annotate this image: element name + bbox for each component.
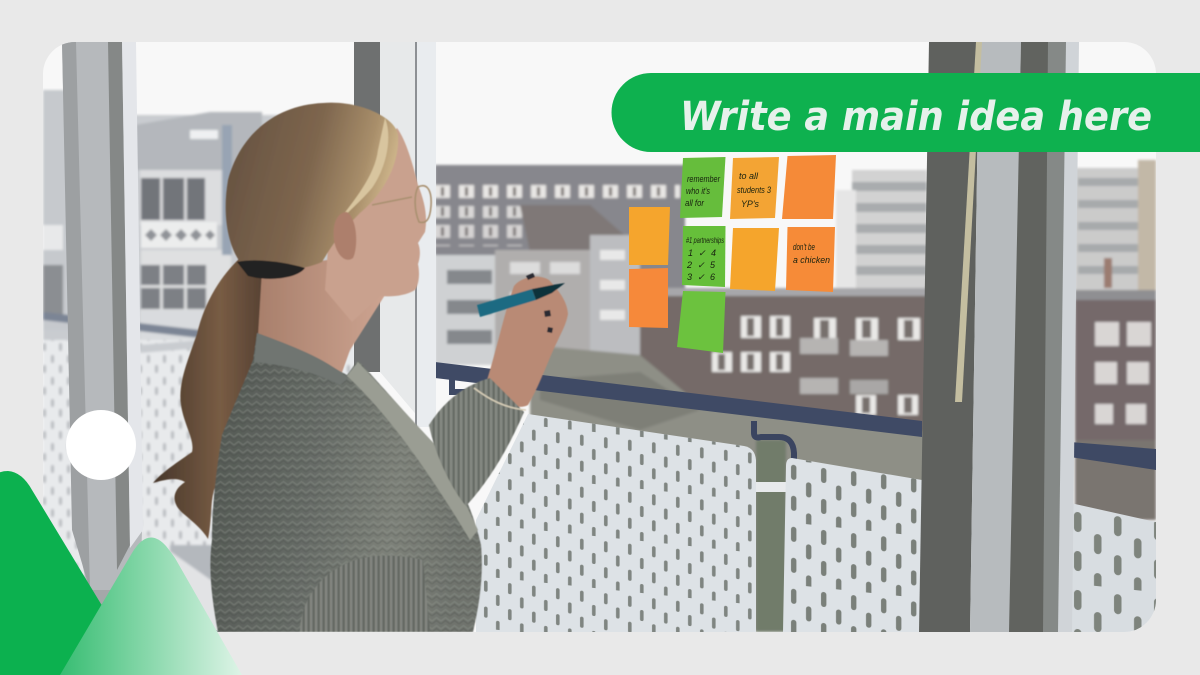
note: to all students: to all xyxy=(739,171,759,181)
note: to all students xyxy=(730,157,779,219)
brown building xyxy=(638,286,925,433)
note: don't be a chicken: a chicken xyxy=(793,255,830,265)
note: blank green bottom xyxy=(677,291,726,353)
perforated balcony panels and railing xyxy=(435,362,1156,632)
note: don't be a chicken: don't be xyxy=(793,242,815,252)
front placket xyxy=(347,362,478,540)
right pale apartment block xyxy=(836,170,927,295)
white lower rail xyxy=(756,482,786,492)
sweater collar xyxy=(254,333,348,385)
note: blank yellow middle xyxy=(730,228,779,291)
face xyxy=(325,128,426,322)
note: don't be a chicken xyxy=(786,227,835,292)
note: checklist xyxy=(682,226,726,287)
sleeve xyxy=(429,378,524,506)
panel one xyxy=(476,414,756,632)
sticky notes xyxy=(629,155,836,353)
panel three xyxy=(1066,502,1156,632)
bracelet xyxy=(474,388,526,410)
middle window frame xyxy=(354,42,436,427)
woman xyxy=(153,103,568,632)
note: checklist: 1 ✓ 4 xyxy=(688,248,716,258)
note: remember why it's all for xyxy=(680,157,726,218)
left window frame xyxy=(62,42,220,632)
glasses xyxy=(372,186,431,222)
far right buildings xyxy=(1075,160,1156,520)
hair xyxy=(226,103,398,269)
panel two xyxy=(783,458,922,632)
left building xyxy=(43,89,328,341)
note: to all students: YP's xyxy=(741,199,759,209)
note: blank orange top xyxy=(782,155,836,219)
title text: Write a main idea here xyxy=(680,94,1152,140)
hand xyxy=(487,277,568,407)
note: remember why it's all for: who it's xyxy=(686,186,710,196)
right window frame with tan cord xyxy=(919,42,1079,632)
hair tie xyxy=(237,260,305,279)
note: to all students: students 3 xyxy=(737,185,771,195)
note: remember why it's all for: remember xyxy=(687,174,721,184)
green triangle decoration xyxy=(0,471,144,675)
marker xyxy=(477,283,565,317)
title banner xyxy=(612,73,1200,152)
trees in lower middle xyxy=(530,345,930,632)
light gradient triangle decoration xyxy=(60,537,242,675)
lower ribbing xyxy=(300,555,430,632)
note: checklist: #1 partnerships xyxy=(686,236,724,245)
white circle decoration xyxy=(66,410,136,480)
navy handrail xyxy=(435,362,922,437)
hair highlight strand xyxy=(345,118,389,213)
blurred city background xyxy=(43,90,1156,632)
note: checklist: 2 ✓ 5 xyxy=(686,260,716,270)
neck xyxy=(258,255,385,378)
note: blank orange left xyxy=(629,268,668,328)
central far building xyxy=(435,165,685,370)
sweater body xyxy=(210,333,482,632)
ponytail xyxy=(153,258,265,539)
note: checklist: 3 ✓ 6 xyxy=(687,272,715,282)
finger nails xyxy=(526,273,553,333)
note: remember why it's all for: all for xyxy=(685,198,705,208)
left balcony panel and rail xyxy=(43,312,355,632)
note: blank yellow left xyxy=(629,207,670,265)
ear xyxy=(334,212,356,260)
